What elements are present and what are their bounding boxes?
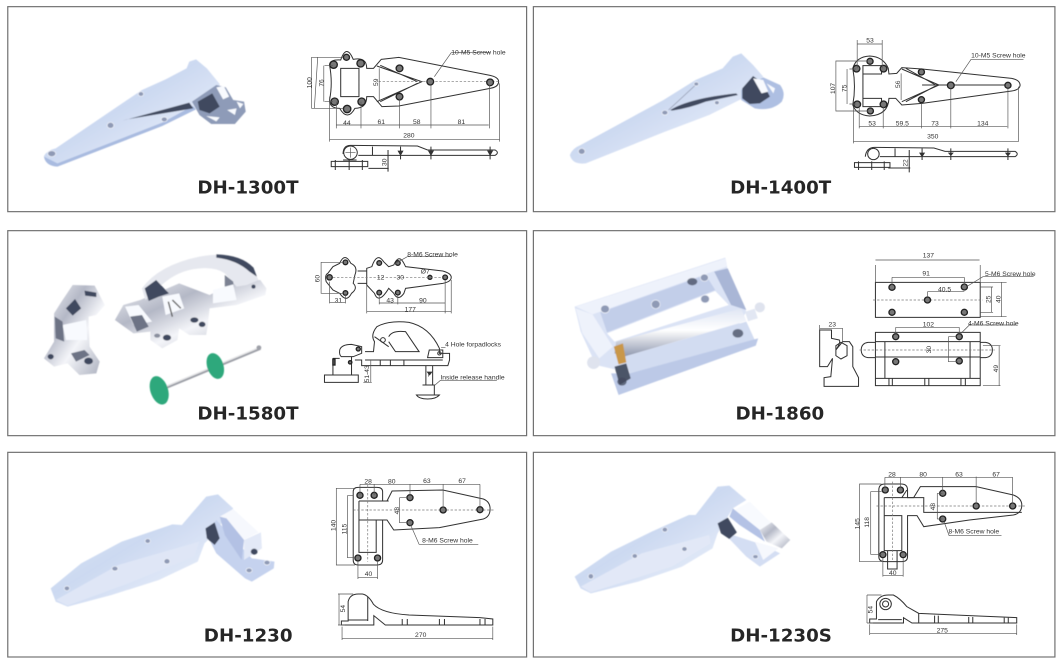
technical drawing: DH-1400T: 350 [927,134,939,141]
technical drawing: DH-1400T: 53 [868,121,876,128]
panel: DH-1230 [8,452,527,657]
technical drawing: DH-1580T: 12 [377,275,385,282]
technical drawing: DH-1300T: 10-M5 Screw hole [451,50,506,57]
model label: DH-1300T: DH-1300T [197,177,299,198]
technical drawing: DH-1860: 25 [985,295,992,303]
panel frame [8,231,527,436]
panel: DH-1580T [8,231,527,436]
technical drawing: DH-1400T: 73 [931,121,939,128]
technical drawing: DH-1300T: 76 [318,79,325,87]
technical drawing: DH-1230S [855,471,1025,635]
technical drawing: DH-1230: 40 [365,571,372,578]
technical drawing: DH-1300T: 59 [373,78,380,86]
technical drawing: DH-1860 [820,252,1036,386]
technical drawing: DH-1230: 80 [388,479,396,486]
technical drawing: DH-1230S: 275 [937,627,948,634]
technical drawing: DH-1230S: 118 [864,517,871,528]
technical drawing: DH-1580T [314,251,505,399]
technical drawing: DH-1230: 115 [341,523,348,534]
technical drawing: DH-1400T: 134 [977,121,989,128]
technical drawing: DH-1230S: 48 [930,503,937,510]
technical drawing: DH-1580T: 51-43 [364,365,371,382]
technical drawing: DH-1860: 49 [993,365,1000,372]
technical drawing: DH-1230: 54 [340,605,347,612]
technical drawing: DH-1860: 5-M6 Screw hole [985,271,1036,278]
technical drawing: DH-1860: 91 [922,270,930,277]
technical drawing: DH-1400T: 10-M5 Screw hole [971,52,1026,59]
technical drawing: DH-1860: 23 [828,322,836,329]
technical drawing: DH-1400T: 22 [903,159,910,167]
technical drawing: DH-1400T: 59.5 [896,121,909,128]
technical drawing: DH-1300T: 280 [403,132,415,139]
technical drawing: DH-1230: 8-M6 Screw hole [422,538,473,545]
technical drawing: DH-1860: 102 [923,321,934,328]
technical drawing: DH-1580T: 4 Hole forpadlocks [445,342,502,349]
product photo: DH-1400T hinge [570,53,784,164]
panel frame [533,231,1055,436]
technical drawing: DH-1400T: 107 [830,83,837,94]
panel: DH-1230S [533,452,1055,657]
product photo: DH-1230 hinge [51,494,274,607]
technical drawing: DH-1580T: Inside release handle [440,374,505,381]
panel: DH-1860 [533,231,1055,436]
technical drawing: DH-1230S: 145 [855,518,862,529]
technical drawing: DH-1300T: 30 [381,158,388,166]
technical drawing: DH-1580T: 31 [335,297,342,304]
technical drawing: DH-1400T [830,38,1026,172]
panel: DH-1400T [533,7,1055,212]
technical drawing: DH-1580T: 43 [386,298,394,305]
technical drawing: DH-1580T: 8-M6 Screw hole [407,251,458,258]
technical drawing: DH-1230S: 67 [992,471,1000,478]
panel frame [8,452,527,657]
panel frame [8,7,527,212]
technical drawing: DH-1300T: 81 [458,119,465,126]
technical drawing: DH-1230: 140 [330,520,337,531]
panel: DH-1300T [8,7,527,212]
technical drawing: DH-1230S: 8-M6 Screw hole [948,529,999,536]
technical drawing: DH-1300T: 58 [413,119,421,126]
technical drawing: DH-1580T: 30 [396,275,404,282]
panel frame [533,452,1055,657]
technical drawing: DH-1230: 63 [423,478,431,485]
technical drawing: DH-1230S: 63 [955,471,963,478]
technical drawing: DH-1400T: 75 [841,84,848,92]
technical drawing: DH-1230: 28 [364,479,372,486]
technical drawing: DH-1580T: 177 [405,306,416,313]
technical drawing: DH-1230: 48 [394,507,401,514]
technical drawing: DH-1230S: 40 [889,570,897,577]
model label: DH-1400T: DH-1400T [730,177,832,198]
technical drawing: DH-1230: 67 [458,478,466,485]
model label: DH-1580T: DH-1580T [197,403,299,424]
model label: DH-1860: DH-1860 [736,403,824,424]
technical drawing: DH-1860: 137 [923,252,934,259]
product photo: DH-1580T latch [44,254,266,407]
model label: DH-1230: DH-1230 [204,626,293,647]
technical drawing: DH-1300T: 44 [343,120,351,127]
technical drawing: DH-1860: 40.5 [938,287,951,294]
technical drawing: DH-1230S: 54 [868,606,875,613]
technical drawing: DH-1580T: 90 [419,298,427,305]
technical drawing: DH-1230 [330,478,493,640]
technical drawing: DH-1860: 30 [926,346,933,353]
technical drawing: DH-1230S: 80 [919,471,927,478]
technical drawing: DH-1230: 270 [415,632,427,639]
technical drawing: DH-1400T: 53 [866,38,874,45]
technical drawing: DH-1230S: 28 [888,472,896,479]
product photo: DH-1860 hinge [575,258,765,395]
technical drawing: DH-1860: 4-M6 Screw hole [968,320,1019,327]
technical drawing: DH-1300T [307,50,506,172]
product photo: DH-1230S hinge [575,486,790,593]
model label: DH-1230S: DH-1230S [730,626,832,647]
technical drawing: DH-1400T: 56 [895,80,902,88]
technical drawing: DH-1860: 40 [995,295,1003,303]
technical drawing: DH-1300T: 61 [378,119,385,126]
panel frame [533,7,1055,212]
product photo: DH-1300T hinge [44,59,246,167]
technical drawing: DH-1580T: Ø7 [421,269,430,276]
technical drawing: DH-1580T: 60 [314,275,321,282]
technical drawing: DH-1300T: 100 [307,77,314,88]
